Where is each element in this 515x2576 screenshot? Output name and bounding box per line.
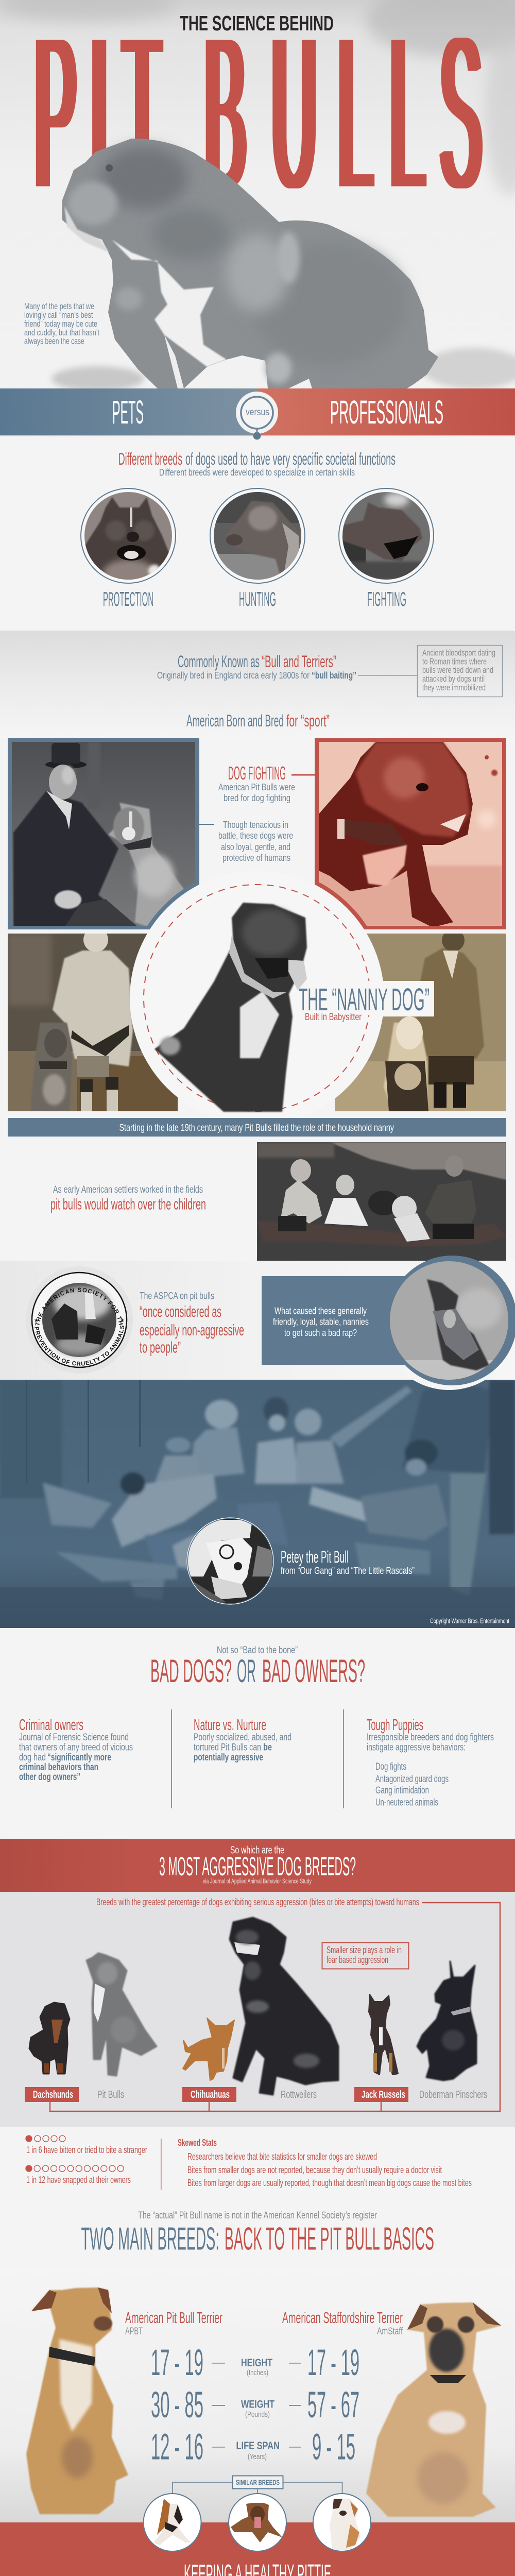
callout: ancient bloodsport [358, 645, 503, 697]
panel: tough puppies: Tough Puppies [367, 1716, 423, 1734]
title: the science behind: THE SCIENCE BEHIND [180, 11, 334, 35]
text: though tenacious: also loyal, gentle, and [221, 842, 290, 852]
comparison table: life span [151, 2427, 355, 2468]
heading: different breeds: Different breeds [118, 449, 182, 468]
intro text: Many of the pets that we [24, 301, 94, 311]
panel: protection [81, 488, 176, 611]
banner: 3 most aggressive dog breeds: So which are the [230, 1844, 284, 1856]
similar breed: bulldog [313, 2494, 371, 2551]
panel: sinbad dog circle with question [262, 1251, 515, 1390]
label: chihuahuas: Chihuahuas [191, 2089, 230, 2100]
intro text [24, 301, 99, 346]
text: settlers: As early American settlers worked in the fields [53, 1184, 203, 1195]
panel: nature vs nurture: potentially agressive [194, 1752, 263, 1763]
heading: american born and bred: American Born and Bred [186, 711, 284, 730]
breed names [125, 2309, 403, 2337]
text: skewed stats: Skewed Stats [178, 2138, 217, 2148]
heading: commonly known as: Commonly Known as [178, 652, 260, 671]
breed names: American Pit Bull Terrier [125, 2309, 222, 2327]
breed names: APBT [125, 2326, 143, 2337]
panel: nanny dog circle [130, 871, 384, 1125]
panel: fighting: FIGHTING [367, 588, 406, 611]
icon: versus collar tag: versus [246, 407, 269, 418]
comparison table: weight: WEIGHT [241, 2399, 274, 2410]
text: aspca quote: The ASPCA on pit bulls [140, 1291, 214, 1302]
text: petey the pit bull [281, 1548, 415, 1577]
photo: red fighting dog [315, 738, 506, 929]
panel: fighting [339, 488, 434, 611]
label: doberman pinschers: Doberman Pinschers [419, 2089, 487, 2100]
callout: ancient bloodsport: they were immobilized [422, 683, 486, 692]
dog: chihuahua [183, 2018, 234, 2080]
text: settlers: pit bulls would watch over the children [50, 1195, 206, 1213]
label: pit bulls: Pit Bulls [97, 2089, 124, 2100]
comparison table: height: HEIGHT [241, 2357, 272, 2369]
comparison table: height: (Inches) [247, 2368, 268, 2377]
text: dog fighting: DOG FIGHTING [228, 762, 286, 784]
dog: jack russel [369, 1994, 398, 2075]
text: though tenacious: battle, these dogs were [218, 831, 293, 841]
panel: tough puppies: Antagonized guard dogs [375, 1774, 449, 1785]
dog: doberman [417, 1961, 476, 2080]
text: BAD OWNERS? [262, 1653, 365, 1689]
text: aspca quote: to people” [140, 1338, 181, 1357]
photo: child with dog sepia left [8, 927, 180, 1113]
subheading: specialized skills: Different breeds were developed to specialize in certain skills [159, 467, 355, 478]
comparison table: weight: (Pounds) [245, 2410, 270, 2419]
panel: breeds lineup [0, 1892, 515, 2127]
breed names: American Staffordshire Terrier [282, 2309, 403, 2327]
dog: dachshund [29, 2003, 70, 2074]
label: jack russels: Jack Russels [362, 2089, 405, 2100]
label: dachshunds: Dachshunds [33, 2089, 73, 2100]
text: what caused: to get such a bad rap? [284, 1327, 357, 1338]
icon: aspca seal: ★ [34, 1318, 39, 1324]
intro text: friend” today may be cute [24, 319, 97, 329]
icon: aspca seal: THE AMERICAN SOCIETY FOR THE [35, 1288, 124, 1325]
text: skewed stats [178, 2138, 472, 2188]
label: the nanny dog [299, 981, 434, 1023]
hero dog photo [62, 139, 438, 388]
panel: tough puppies: Gang intimidation [375, 1785, 429, 1796]
panel: criminal owners: criminal behaviors than [19, 1762, 98, 1773]
text: dog fighting: bred for dog fighting [224, 793, 290, 803]
icon: aspca seal [31, 1272, 133, 1368]
panel: keeping a healthy pittie banner [0, 2522, 515, 2576]
photo: children with dog on blanket [257, 1142, 506, 1261]
text: skewed stats: Researchers believe that bite statistics for smaller dogs are skewed [187, 2151, 377, 2162]
photo: petey circle [187, 1518, 273, 1604]
banner: 3 most aggressive dog breeds: via Journal of Applied Animal Behavior Science Study [203, 1877, 312, 1885]
icon: aspca seal: ★ [120, 1318, 125, 1324]
panel: criminal owners: dog had [19, 1752, 46, 1763]
text: dog fighting [218, 762, 315, 803]
dog: pit bull grey [87, 1953, 157, 2076]
comparison table: height: 17 - 19 [151, 2343, 203, 2383]
intro text: lovingly call “man’s best [24, 310, 93, 320]
dog: rottweiler [230, 1918, 338, 2095]
panel: nature vs nurture [194, 1716, 291, 1763]
panel: criminal owners: “significantly more [47, 1752, 111, 1763]
panel: tough puppies [367, 1716, 494, 1808]
banner: 3 most aggressive dog breeds [0, 1839, 515, 1892]
callout: ancient bloodsport: to Roman times where [422, 656, 487, 667]
panel: criminal owners [19, 1716, 133, 1783]
comparison table: height [151, 2343, 359, 2383]
dog: american staffordshire terrier [366, 2302, 501, 2517]
panel: nature vs nurture: be [263, 1742, 272, 1753]
subheading: actual pit bull name: The “actual” Pit Bull name is not in the American Kennel Society’s register [138, 2210, 377, 2221]
text: petey the pit bull: Petey the Pit Bull [281, 1548, 349, 1566]
photo: nanny dog [154, 903, 307, 1112]
panel: bull baiting background [0, 631, 515, 738]
text: what caused: What caused these generally [274, 1306, 367, 1316]
label: jack russels [354, 2087, 408, 2102]
panel: two main breeds background [0, 2267, 515, 2522]
subheading: bad to the bone: Not so “Bad to the bone” [217, 1645, 298, 1656]
banner: household nanny: Starting in the late 19th century, many Pit Bulls filled the role of the household nanny [119, 1123, 394, 1133]
comparison table: life span: (Years) [248, 2452, 267, 2461]
text: what caused [273, 1306, 369, 1338]
text: though tenacious: Though tenacious in [223, 820, 288, 830]
text: petey the pit bull: from “Our Gang” and “The Little Rascals” [281, 1566, 415, 1577]
photo: boy with dog sepia right [335, 929, 506, 1111]
similar breed: bull terrier [143, 2494, 201, 2551]
label: the nanny dog: Built in Babysitter [305, 1012, 362, 1023]
subheading: bull baiting: Originally bred in England circa early 1800s for [157, 670, 310, 681]
callout: smaller size: Smaller size plays a role in [327, 1945, 402, 1955]
icon: aspca seal: PREVENTION OF CRUELTY TO ANIMALS [35, 1325, 124, 1366]
comparison table: life span: LIFE SPAN [236, 2440, 280, 2452]
subheading: bull baiting: “bull baiting” [312, 670, 356, 681]
stat: 1 in 6 [26, 2136, 147, 2155]
text: 17 - 19 [307, 2343, 359, 2383]
panel: hunting [210, 488, 305, 611]
panel: pets versus professionals band: PETS [112, 394, 144, 431]
stat: 1 in 6: 1 in 6 have bitten or tried to bite a stranger [26, 2144, 147, 2155]
panel: nature vs nurture: Poorly socialized, abused, and [194, 1732, 291, 1743]
text: dog fighting: American Pit Bulls were [218, 782, 295, 792]
label: dachshunds [25, 2087, 79, 2102]
panel: tough puppies: Dog fights [375, 1761, 406, 1772]
comparison table: life span: 12 - 16 [151, 2427, 203, 2468]
bracket connector [50, 1903, 500, 2111]
callout: smaller size: fear based aggression [327, 1955, 388, 1965]
stat: 1 in 12 [26, 2165, 131, 2185]
panel: tough puppies: instigate aggressive behaviors: [367, 1742, 466, 1753]
stat: 1 in 12: 1 in 12 have snapped at their owners [26, 2174, 131, 2185]
photo band: our gang [0, 1380, 515, 1628]
label: chihuahuas [182, 2087, 236, 2102]
panel: nature vs nurture: tortured Pit Bulls can [194, 1742, 261, 1753]
callout: ancient bloodsport: attacked by dogs until [422, 674, 485, 684]
text: aspca quote: especially non-aggressive [140, 1321, 244, 1339]
text: though tenacious [199, 820, 293, 863]
heading: commonly known as: “Bull and Terriers” [262, 652, 336, 671]
heading: american born and bred: for “sport” [286, 711, 330, 730]
question box [262, 1276, 406, 1365]
text: settlers [50, 1184, 206, 1213]
text: aspca quote [140, 1291, 244, 1357]
heading: two main breeds: TWO MAIN BREEDS: [81, 2222, 219, 2257]
text: 9 - 15 [312, 2427, 355, 2468]
comparison table: weight [151, 2385, 359, 2426]
panel: hero [0, 0, 515, 391]
panel: nature vs nurture: Nature vs. Nurture [194, 1716, 266, 1734]
text: though tenacious: protective of humans [222, 853, 290, 863]
label: rottweilers: Rottweilers [281, 2089, 317, 2100]
similar breeds connector [173, 2476, 342, 2495]
callout: smaller size [322, 1942, 409, 1969]
breed names: AmStaff [377, 2326, 403, 2337]
panel: criminal owners: Journal of Forensic Science found [19, 1732, 129, 1743]
banner: household nanny [8, 1118, 506, 1137]
intro text: always been the case [24, 336, 84, 346]
panel: criminal owners: that owners of any breed of vicious [19, 1742, 133, 1753]
panel: tough puppies: Un-neutered animals [375, 1798, 438, 1808]
panel: criminal owners: other dog owners” [19, 1772, 80, 1783]
panel: hunting: HUNTING [239, 588, 276, 611]
heading: bad dogs or bad owners: BAD DOGS? [150, 1653, 232, 1689]
intro text: and cuddly, but that hasn’t [24, 328, 99, 337]
dog: american pit bull terrier [26, 2287, 128, 2514]
heading: different breeds [118, 449, 396, 468]
panel: aspca background [0, 1261, 515, 1380]
similar breeds connector: SIMILAR BREEDS [236, 2479, 280, 2486]
heading: bad dogs or bad owners: OR [237, 1653, 256, 1689]
text: what caused: friendly, loyal, stable, nannies [273, 1316, 369, 1327]
similar breed: staffordshire [229, 2494, 286, 2551]
text: aspca quote: “once considered as [140, 1302, 221, 1320]
photo: man with top hat and dog [8, 738, 199, 929]
panel: protection: PROTECTION [103, 588, 153, 611]
comparison table: weight: 30 - 85 [151, 2385, 203, 2426]
icon: versus collar tag [236, 392, 278, 440]
panel: criminal owners: Criminal owners [19, 1716, 83, 1734]
text: 57 - 67 [307, 2385, 359, 2426]
panel: pets versus professionals band [0, 388, 515, 440]
